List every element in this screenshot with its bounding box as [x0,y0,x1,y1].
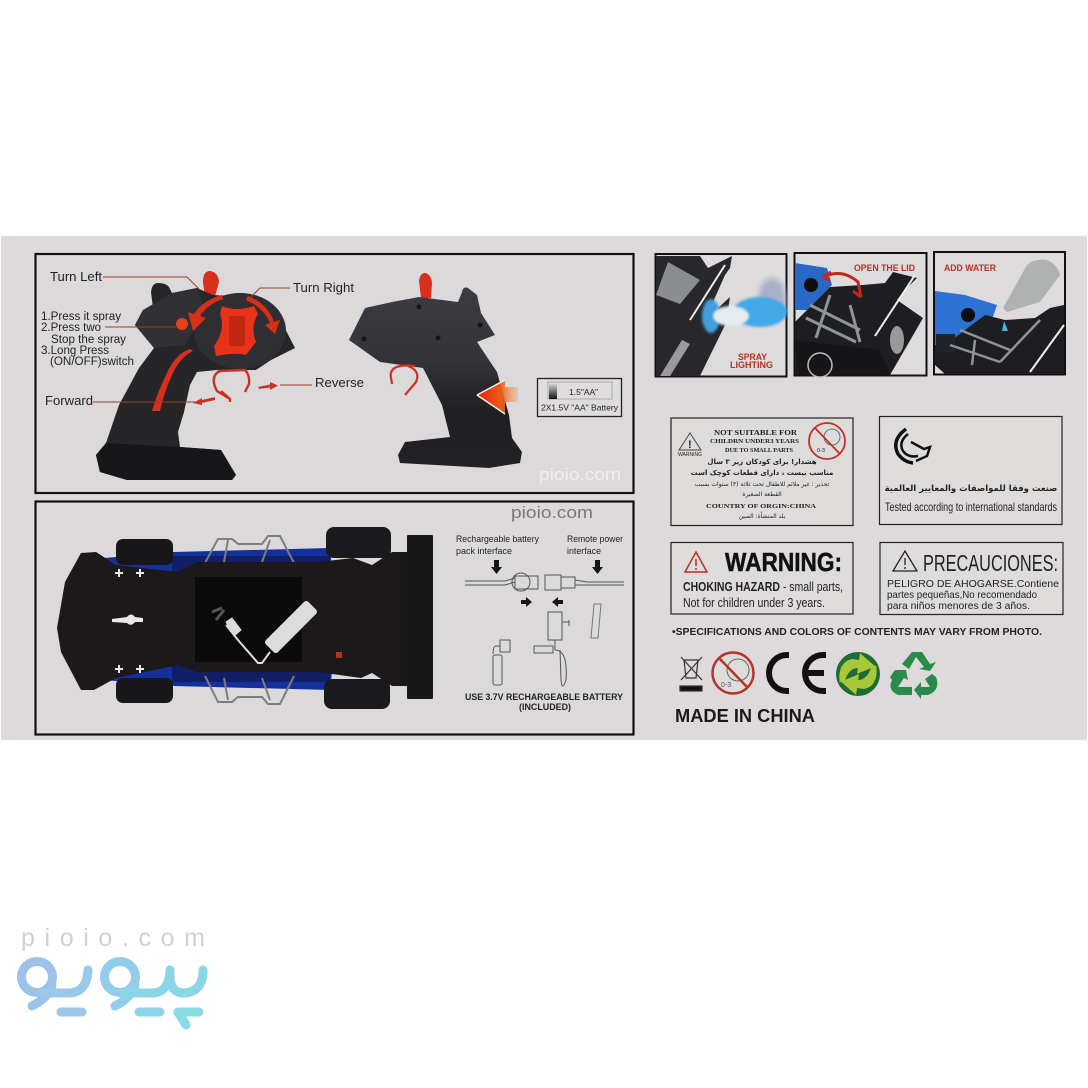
label: tested standards: صنعت وفقا للمواصفات والمعايير العالمية [885,484,1057,494]
label: not suitable for children: DUE TO SMALL PARTS [725,447,793,454]
panel: car underside and charging [36,502,634,734]
callout lines [93,277,312,402]
warning triangle: ! [688,439,692,451]
label: warning choking hazard: Not for children under 3 years. [683,595,825,610]
battery spec box [538,378,622,416]
standards logo [896,429,930,463]
icon: not for under 3: 0-3 [721,682,731,689]
label: precauciones: PELIGRO DE AHOGARSE.Contiene [887,578,1059,590]
red trigger left [214,370,249,402]
label: tested standards [880,416,1062,524]
label: not suitable for children: بلد المنشأة: الصين [739,511,786,520]
icon: recycle [890,652,937,699]
battery and connector [212,600,318,663]
box panel background [1,236,1087,740]
charging labels: pack interface [456,546,512,557]
right controller [349,273,522,468]
warning triangle [893,551,917,571]
side roll bars [205,536,294,704]
label: not suitable for children: NOT SUITABLE FOR [714,428,798,437]
specification note: •SPECIFICATIONS AND COLORS OF CONTENTS MAY VARY FROM PHOTO. [672,626,1042,638]
label: not suitable for children: تحذير : غير ملائم للاطفال تحت ثلاثة (٣) سنوات بسبب [695,481,830,488]
icon: crossed out bin [680,657,702,691]
chassis body [57,552,409,690]
red trigger right [391,366,417,395]
large insert arrow [477,380,518,414]
icon: CE mark [769,655,826,691]
callout labels: 3.Long Press [41,345,109,357]
callout labels: Reverse [315,376,364,390]
label: not suitable for children: القطعة الصغيرة [742,491,782,498]
label: precauciones: para niños menores de 3 años. [887,600,1030,612]
white screws and key [112,569,144,673]
step photo: open the lid [794,253,926,377]
black arrows [491,560,603,607]
step photo: spray lighting: SPRAY [738,352,768,363]
no under 3 icon [809,423,845,459]
step photo: spray lighting: LIGHTING [730,360,773,371]
warning triangle [678,433,702,458]
label: precauciones [880,542,1063,614]
watermark: pioio.com [511,503,593,522]
battery note: USE 3.7V RECHARGEABLE BATTERY [465,692,623,702]
label: not suitable for children: CHILDRN UNDER3 YEARS [710,438,799,445]
callout labels: Stop the spray [51,334,126,346]
small direction arrows [193,382,278,405]
made in china: MADE IN CHINA [675,706,815,726]
logo: pioio [21,924,205,1025]
label: precauciones: partes pequeñas,No recomendado [887,589,1037,601]
label: warning choking hazard: CHOKING HAZARD - small parts, [683,579,843,594]
callout labels: Forward [45,394,93,408]
warning triangle [685,552,707,572]
callout labels: Turn Right [293,281,355,295]
watermark: pioio.com [539,465,621,484]
battery spec box: 2X1.5V "AA" Battery [541,402,619,412]
charging labels: interface [567,546,601,557]
charging labels [456,534,623,557]
charging labels: Remote power [567,534,623,545]
car chassis [57,527,433,709]
label: not suitable for children: COUNTRY OF ORGIN:CHINA [706,503,816,510]
label: not suitable for children [671,418,853,526]
logo: pioio: pioio.com [21,924,205,952]
left controller [96,271,295,480]
step photo: open the lid: OPEN THE LID [854,263,915,274]
callout labels: (ON/OFF)switch [50,356,134,368]
callout labels: 2.Press two [41,322,101,334]
icon: green dot [836,651,880,697]
connector diagram [465,573,624,686]
step photo: spray lighting [656,254,787,376]
battery spec box: 1.5"AA" [569,387,598,397]
charging labels: Rechargeable battery [456,534,539,545]
step photo: add water [934,252,1065,374]
callout labels: Turn Left [50,270,103,284]
panel: remote controller [36,254,634,493]
icon: not for under 3 [712,652,754,694]
warning triangle: WARNING [678,452,702,458]
rotation arrows on wheel [188,295,280,334]
battery note [465,692,623,712]
no under 3 icon: 0-3 [817,448,825,454]
label: warning choking hazard: WARNING: [725,547,842,577]
step photo: add water: ADD WATER [944,263,996,274]
label: not suitable for children: مناسب نیست ، دارای قطعات کوچک است [691,469,833,477]
callout labels: 1.Press it spray [41,311,121,323]
callout labels [41,270,364,408]
battery note: (INCLUDED) [519,702,571,712]
wheels [116,539,173,565]
label: warning choking hazard [671,542,853,614]
label: not suitable for children: هشدار! برای کودکان زیر ۳ سال [707,458,817,466]
logo mark [22,962,203,1025]
